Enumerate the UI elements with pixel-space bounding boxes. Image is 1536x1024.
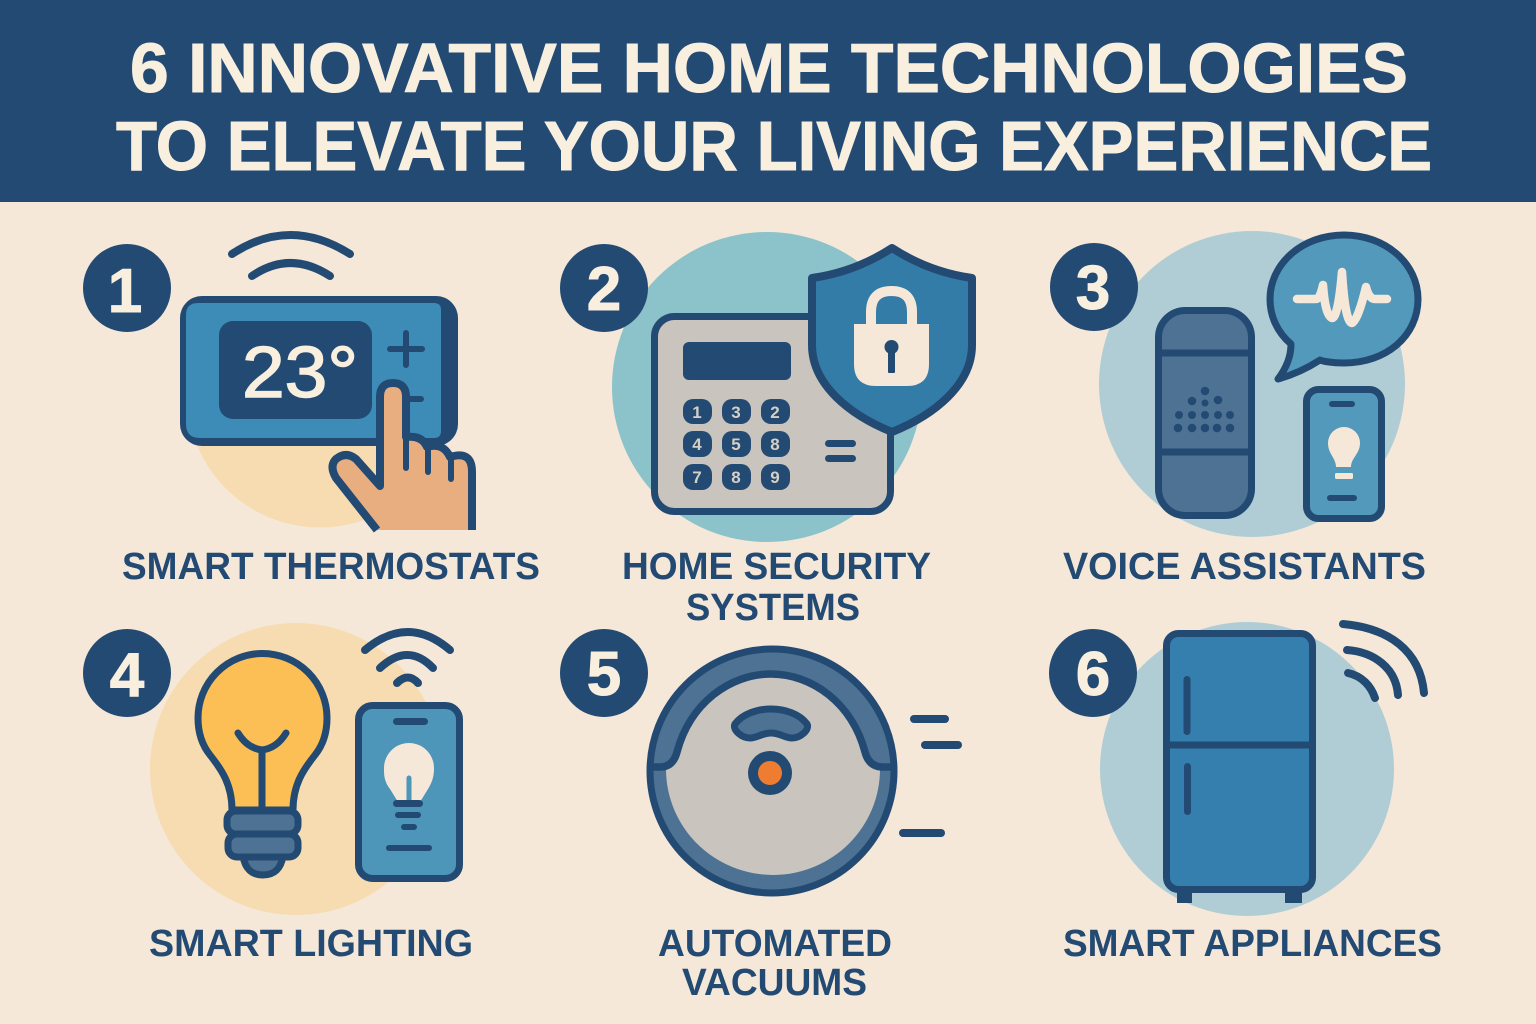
background circle: teal bbox=[612, 232, 922, 542]
panel: smart lighting bbox=[83, 623, 473, 965]
icon: pointing hand bbox=[332, 383, 472, 530]
number badge 6 bbox=[1049, 629, 1137, 717]
icon: shield with padlock bbox=[812, 248, 972, 432]
number badge 4 bbox=[83, 629, 171, 717]
icon: keypad bbox=[654, 316, 890, 512]
icon: keypad: 5 bbox=[731, 435, 741, 454]
icon: wireless waves bbox=[232, 235, 350, 276]
icon: keypad: 9 bbox=[770, 468, 780, 487]
icon: robot vacuum bbox=[650, 649, 894, 893]
icon: wi-fi signal bbox=[365, 632, 450, 683]
number badge 1: 1 bbox=[108, 257, 142, 326]
icon: phone with bulb bbox=[358, 706, 460, 878]
number badge 2: 2 bbox=[587, 255, 621, 324]
icon: keypad: 1 bbox=[692, 403, 702, 422]
background circle: peach bbox=[150, 623, 442, 915]
number badge 3: 3 bbox=[1076, 254, 1110, 323]
icon: keypad: 4 bbox=[692, 435, 702, 454]
icon: speech bubble with sound wave bbox=[1270, 235, 1418, 379]
icon: keypad: 2 bbox=[770, 403, 780, 422]
icon: thermostat bbox=[180, 296, 458, 446]
icon: keypad: 7 bbox=[692, 468, 702, 487]
number badge 6: 6 bbox=[1076, 640, 1110, 709]
header banner with title bbox=[0, 0, 1536, 202]
number badge 3 bbox=[1050, 243, 1138, 331]
icon: smart speaker bbox=[1158, 310, 1252, 516]
number badge 5: 5 bbox=[587, 640, 621, 709]
label: automated vacuums: VACUUMS bbox=[682, 962, 867, 1004]
number badge 5 bbox=[560, 629, 648, 717]
panel: smart thermostats bbox=[83, 235, 540, 588]
label: smart appliances: SMART APPLIANCES bbox=[1063, 923, 1442, 965]
icon: keypad: 3 bbox=[731, 403, 741, 422]
label: smart lighting: SMART LIGHTING bbox=[149, 923, 473, 965]
label: home security systems: HOME SECURITY bbox=[622, 546, 931, 588]
icon: wireless waves bbox=[1343, 624, 1424, 698]
label: home security systems bbox=[622, 546, 931, 629]
label: smart thermostats: SMART THERMOSTATS bbox=[122, 546, 540, 588]
number badge 1 bbox=[83, 244, 171, 332]
panel: automated vacuums bbox=[560, 629, 962, 1004]
panel: smart appliances bbox=[1049, 622, 1442, 965]
panel: voice assistants bbox=[1050, 231, 1426, 588]
label: voice assistants: VOICE ASSISTANTS bbox=[1063, 546, 1426, 588]
icon: keypad: 8 bbox=[770, 435, 780, 454]
panel: home security systems bbox=[560, 232, 972, 629]
number badge 2 bbox=[560, 244, 648, 332]
icon: motion lines bbox=[899, 715, 962, 837]
icon: refrigerator bbox=[1166, 634, 1313, 903]
icon: light bulb bbox=[198, 654, 327, 875]
label: automated vacuums bbox=[658, 923, 892, 1004]
header banner with title: TO ELEVATE YOUR LIVING EXPERIENCE bbox=[116, 107, 1432, 185]
number badge 4: 4 bbox=[110, 641, 145, 710]
background circle: light blue bbox=[1100, 622, 1394, 916]
background circle: light blue bbox=[1099, 231, 1405, 537]
label: home security systems: SYSTEMS bbox=[686, 587, 860, 629]
header banner with title: 6 INNOVATIVE HOME TECHNOLOGIES bbox=[130, 29, 1408, 107]
background circle: peach bbox=[195, 440, 445, 528]
icon: phone with bulb bbox=[1306, 390, 1382, 518]
label: automated vacuums: AUTOMATED bbox=[658, 923, 892, 965]
icon: keypad: 8 bbox=[731, 468, 741, 487]
icon: thermostat: 23° bbox=[242, 333, 358, 413]
